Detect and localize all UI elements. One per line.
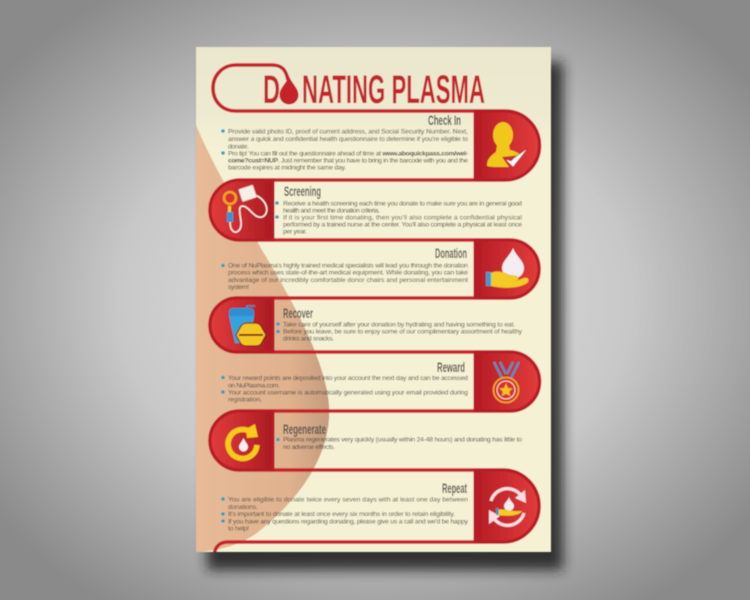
text: on NuPlasma.com. [228, 382, 280, 390]
peach background shape [196, 125, 329, 552]
poster shadow [207, 62, 563, 570]
red block [475, 111, 540, 180]
heading: Donation [435, 245, 467, 261]
text: advantage of our incredibly comfortable donor chairs and personal entertainment [228, 277, 468, 284]
icon: hand with drop [486, 248, 528, 288]
text: no adverse effects. [283, 444, 335, 451]
panel: screening [210, 180, 522, 240]
text [221, 262, 468, 291]
heading: Repeat [442, 480, 467, 496]
text: One of NuPlasma's highly trained medical specialists will lead you through the donation [228, 262, 468, 270]
red block [210, 180, 273, 240]
text: per year. [283, 228, 307, 236]
text [221, 496, 469, 532]
poster sheet [196, 47, 551, 552]
text: health and meet the donation criteria. [283, 208, 380, 214]
title [263, 68, 485, 112]
text: Plasma regenerates very quickly (usually within 24-48 hours) and donating has little to [283, 436, 522, 444]
red block [475, 470, 539, 542]
text: donations. [228, 504, 258, 511]
poster [196, 47, 551, 556]
heading: Regenerate [283, 421, 326, 437]
text: If you have any questions regarding donating, please give us a call and we'd be happy [228, 518, 469, 526]
text [221, 128, 468, 172]
red block [475, 240, 539, 298]
red block [210, 298, 273, 352]
text: Your account username is automatically generated using your email provided during [228, 390, 468, 396]
panel: repeat [221, 470, 539, 542]
text: Take care of yourself after your donation by hydrating and having something to eat. [283, 322, 515, 328]
heading: Reward [437, 359, 465, 375]
panel: check in [221, 111, 539, 180]
text: come?cust=NUP. Just remember that you have to bring in the barcode with you and the [228, 158, 468, 164]
heading: Screening [284, 183, 321, 199]
text: Receive a health screening each time you donate to make sure you are in general good [283, 200, 522, 208]
text: barcode expires at midnight the same day. [228, 164, 346, 172]
red block [210, 411, 273, 470]
icon: repeat cycle [489, 489, 526, 525]
text: It's important to donate at least once every six months in order to retain eligibility. [228, 511, 455, 518]
icon: regenerate arrow [228, 424, 258, 458]
text: Before you leave, be sure to enjoy some of our complimentary assortment of healthy [283, 328, 523, 336]
panel: donation [221, 240, 539, 298]
text: to help! [228, 526, 249, 532]
panel: recover [210, 298, 523, 352]
text: drinks and snacks. [283, 336, 334, 342]
text: system! [228, 284, 249, 291]
red block [475, 352, 540, 411]
text [276, 322, 523, 342]
icon: blood pressure cuff [224, 185, 267, 232]
text: Provide valid photo ID, proof of current address, and Social Security Number. Next, [228, 128, 468, 136]
panel: regenerate [210, 411, 522, 470]
heading: Check In [428, 112, 461, 128]
text: Your reward points are deposited into your account the next day and can be accessed [228, 375, 468, 382]
text: process which uses state-of-the-art medical equipment. While donating, you can take [228, 270, 468, 276]
panel: reward [221, 352, 539, 411]
icon: person with check [487, 122, 528, 167]
text: registration. [228, 396, 262, 404]
text: performed by a trained nurse at the center. You'll also complete a physical at least once [283, 222, 522, 228]
text: Pro tip! You can fill out the questionnaire ahead of time at www.aboquickpass.com/wel- [228, 150, 468, 158]
text [221, 375, 468, 404]
text: donate. [228, 144, 249, 150]
text: answer a quick and confidential health questionnaire to determine if you're eligible to [228, 136, 468, 143]
text [276, 436, 522, 451]
icon: cup and burger [229, 306, 266, 346]
title letters: NATING PLASMA [302, 68, 485, 112]
text: If it is your first time donating, then you'll also complete a confidential physical [283, 214, 522, 222]
icon: medal [494, 362, 519, 402]
icon: blood drop [280, 76, 298, 104]
serpentine red line [210, 65, 539, 556]
heading: Recover [283, 305, 313, 321]
text [275, 200, 522, 236]
title letter D: D [263, 68, 280, 112]
text: You are eligible to donate twice every seven days with at least one day between [228, 496, 468, 504]
